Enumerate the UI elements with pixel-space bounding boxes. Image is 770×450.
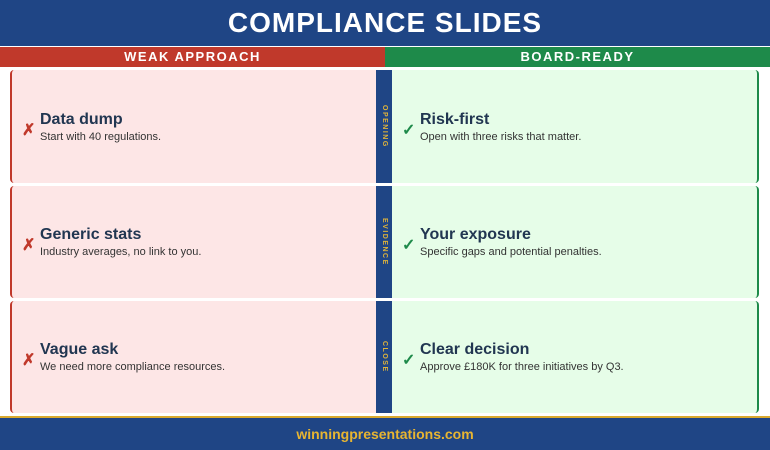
panel: strong opening — [392, 70, 759, 183]
label: close: CLOSE — [381, 341, 388, 373]
label: opening — [376, 70, 393, 183]
column header: board-ready: BOARD-READY — [520, 49, 634, 64]
column header: weak approach — [0, 47, 385, 67]
title: COMPLIANCE SLIDES — [228, 7, 542, 38]
panel: weak close: ✗ — [22, 352, 35, 369]
title — [0, 0, 770, 46]
panel: strong close: Approve £180K for three initiatives by Q3. — [420, 361, 624, 373]
panel: weak opening — [10, 70, 377, 183]
label: close — [376, 301, 393, 413]
panel: weak opening: Data dump — [40, 110, 123, 128]
label: opening: OPENING — [381, 105, 388, 148]
panel: weak evidence: ✗ — [22, 237, 35, 254]
panel: weak evidence: Generic stats — [40, 226, 141, 243]
column header: board-ready — [385, 47, 770, 67]
panel: strong evidence: ✓ — [402, 237, 415, 254]
panel: strong close: ✓ — [402, 352, 415, 369]
panel: weak close: Vague ask — [40, 341, 118, 358]
panel: strong close: Clear decision — [420, 341, 529, 358]
panel: strong evidence — [392, 186, 759, 298]
label: evidence: EVIDENCE — [381, 218, 388, 266]
panel: strong opening: ✓ — [402, 122, 415, 138]
panel: strong close — [392, 301, 759, 413]
panel: strong opening: Open with three risks that matter. — [420, 130, 581, 142]
footer: winningpresentations.com — [296, 426, 474, 442]
panel: strong opening: Risk-first — [420, 110, 489, 128]
panel: weak close: We need more compliance resources. — [40, 361, 225, 373]
panel: strong evidence: Your exposure — [420, 226, 531, 243]
panel: weak opening: Start with 40 regulations. — [40, 130, 161, 142]
panel: weak opening: ✗ — [22, 122, 35, 138]
panel: strong evidence: Specific gaps and potential penalties. — [420, 246, 602, 258]
label: evidence — [376, 186, 393, 298]
panel: weak evidence — [10, 186, 377, 298]
panel: weak close — [10, 301, 377, 413]
footer — [0, 416, 770, 450]
column header: weak approach: WEAK APPROACH — [124, 49, 261, 64]
panel: weak evidence: Industry averages, no link to you. — [40, 246, 201, 258]
